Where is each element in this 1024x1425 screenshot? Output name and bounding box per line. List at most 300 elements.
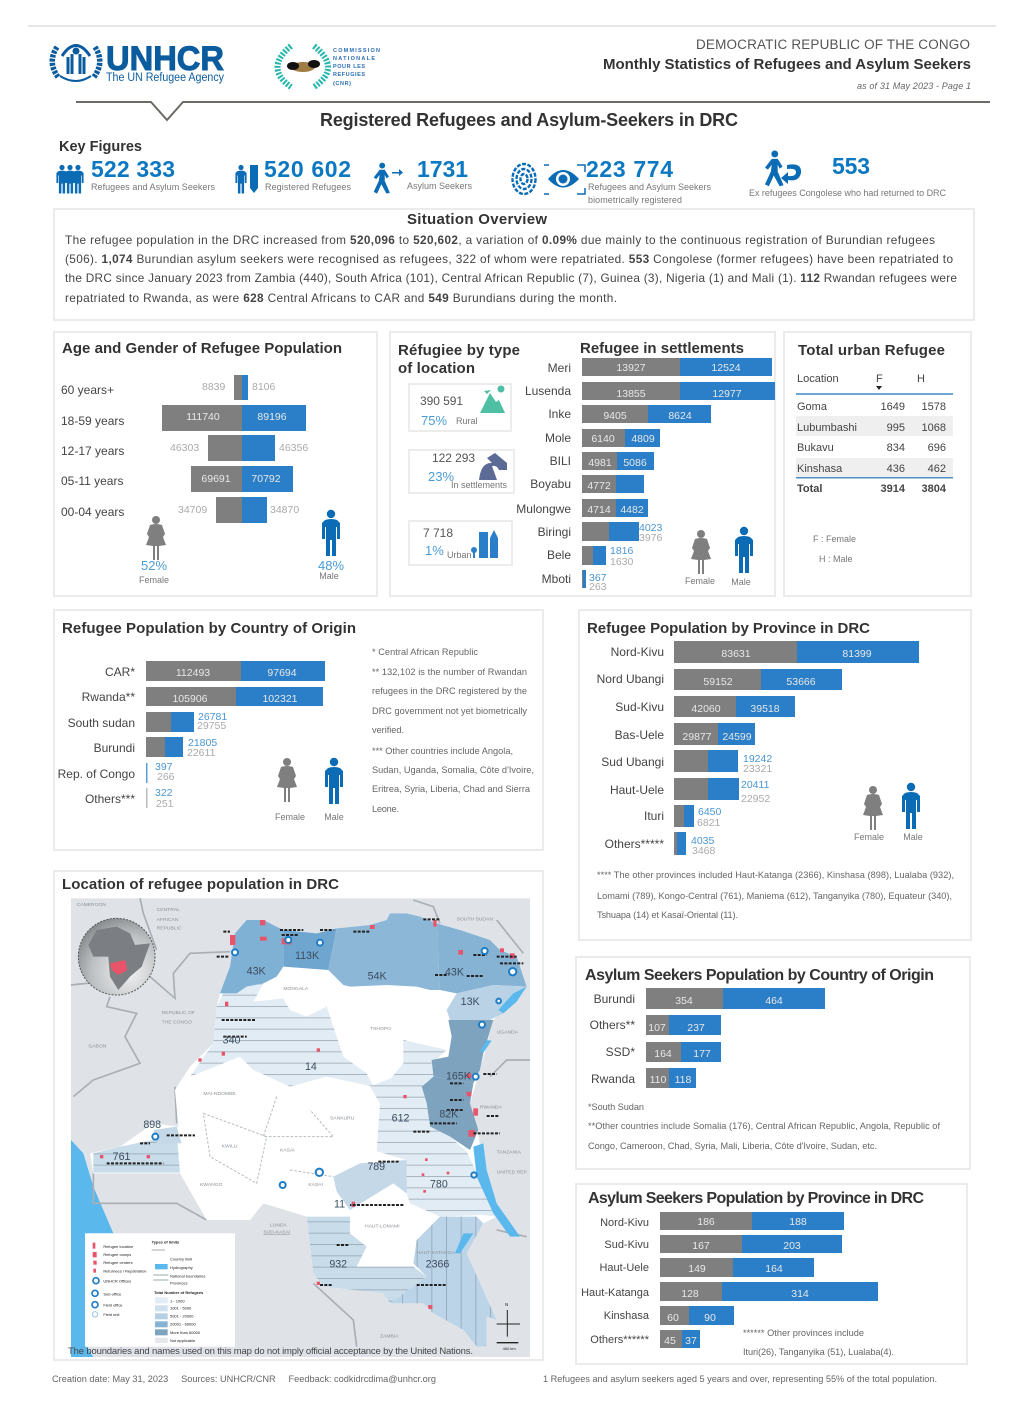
card: rural: Rural: [456, 416, 478, 426]
province: Nord-Kivu: [432, 1020, 493, 1083]
legend: total number of refugees: Total Number of Refugees: [154, 1290, 204, 1295]
bar: Mole: [545, 429, 660, 447]
bar: Meri: Meri: [548, 361, 571, 375]
bar: Meri: 13927: [616, 362, 646, 374]
female share: 52%: [141, 558, 167, 573]
row: 12-17 years: 46303: [170, 442, 199, 454]
female share: Female: [139, 575, 169, 585]
figure: asylum seekers: 1731: [417, 156, 468, 182]
legend: total number of refugees: Not applicable: [170, 1338, 196, 1343]
bar: Others: 322: [155, 787, 173, 799]
legend: total number of refugees: 1 - 1000: [170, 1298, 185, 1303]
card: urban: 7 718: [423, 526, 453, 540]
province value labels: 13K: [461, 996, 480, 1008]
panel: refugee population by province: [579, 610, 971, 940]
bar: CAR: 97694: [267, 667, 297, 679]
row: 05-11 years: 70792: [251, 473, 281, 485]
heading: Key Figures: [59, 139, 142, 155]
table: 834: [887, 442, 905, 454]
bar: Nord-Kivu: [600, 1212, 844, 1230]
bar: Meri: 12524: [711, 362, 741, 374]
card: rural: 75%: [421, 413, 447, 428]
map place names: MAI-NDOMBE: [203, 1091, 236, 1097]
bar: Biringi: 4023: [639, 522, 663, 534]
bar: Others: 4035: [691, 835, 715, 847]
bar: Nord-Kivu: 186: [697, 1216, 715, 1228]
bar: Nord-Kivu: 188: [789, 1216, 807, 1228]
bar: Bas-Uele: 24599: [722, 731, 752, 743]
bar: Ituri: 6821: [697, 817, 721, 829]
row: 18-59 years: 89196: [257, 411, 287, 423]
figure: biometric: 223 774: [586, 156, 673, 182]
heading: Age and Gender of Refugee Population: [62, 340, 342, 357]
bar: Bele: 1816: [610, 545, 634, 557]
province: Tanganyika: [378, 1152, 497, 1217]
panel: refugee by location and settlements: [390, 332, 775, 596]
bar: Bas-Uele: Bas-Uele: [615, 728, 664, 742]
heading: type of location: of location: [398, 360, 475, 377]
bar: Inke: [548, 405, 711, 423]
map place names: KWANGO: [200, 1182, 223, 1188]
bar: Nord-Kivu: [611, 641, 919, 663]
bar: Sud Ubangi: Sud Ubangi: [601, 755, 664, 769]
table: Goma: [797, 401, 828, 413]
row: 60 years+: [61, 375, 276, 400]
row: 00-04 years: 34709: [178, 504, 207, 516]
map disclaimer: The boundaries and names used on this map do not imply official acceptance by the United Nations.: [68, 1346, 473, 1357]
province: Maniema: [370, 1063, 467, 1152]
legend symbols: Returnees / Repatriation: [103, 1268, 147, 1273]
bar: Burundi: Burundi: [94, 741, 135, 755]
bar: Others: Others***: [85, 792, 135, 806]
province: Kongo Central: [93, 1133, 180, 1173]
icon: mountains: [480, 386, 505, 413]
bar: Sud-Kivu: [604, 1235, 842, 1253]
map place names: AFRICAN: [157, 917, 179, 923]
bar: Haut-Katanga: 128: [681, 1288, 699, 1300]
map place names: SUD-KASAI: [263, 1229, 290, 1235]
province: Equateur and Tshopo: [190, 983, 373, 1087]
CNR name: REFUGIES: [333, 72, 365, 78]
bar: Haut-Uele: [610, 778, 770, 805]
legend symbols: Refugee centers: [103, 1260, 133, 1265]
bar: Ituri: Ituri: [644, 809, 664, 823]
row: 00-04 years: 34870: [270, 504, 299, 516]
figure: returnees: [749, 151, 946, 198]
bar: Sud-Kivu: 203: [783, 1240, 801, 1252]
footer right: 1 Refugees and asylum seekers aged 5 years and over, representing 55% of the total population.: [543, 1374, 937, 1384]
icon: laurel wreath and handshake: [278, 46, 328, 87]
bar: Meri: [548, 358, 772, 376]
icon: person and pencil: [235, 165, 258, 194]
bar: Biringi: Biringi: [538, 525, 571, 539]
legend: female: Female: [275, 812, 305, 822]
bar: Haut-Katanga: [581, 1282, 878, 1301]
province: Sud-Kivu: [422, 1077, 478, 1150]
country name: DEMOCRATIC REPUBLIC OF THE CONGO: [696, 37, 970, 52]
province value labels: 54K: [368, 970, 387, 982]
province value labels: 11: [334, 1198, 345, 1210]
footnote: Ituri(26), Tanganyika (51), Lualaba(4).: [743, 1347, 894, 1357]
bar: Biringi: [538, 522, 663, 544]
footnote: Tshuapa (14) et Kasaï-Oriental (11).: [597, 910, 738, 920]
figure: total: Refugees and Asylum Seekers: [91, 182, 216, 192]
province value labels: 14: [305, 1061, 317, 1073]
map place names: KASAI: [308, 1182, 323, 1188]
table: 1649: [881, 401, 905, 413]
row: 05-11 years: [61, 466, 293, 492]
table: Lubumbashi: [797, 422, 857, 434]
footnotes: Eritrea, Syria, Liberia, Chad and Sierra: [372, 784, 531, 794]
bar: Rwanda: 105906: [172, 693, 208, 705]
map place names: LUNDA: [270, 1223, 288, 1229]
footnote: [597, 870, 954, 920]
map place names: REPUBLIC: [157, 925, 182, 931]
province: Kinshasa: [153, 1127, 182, 1143]
legend: male: [731, 527, 753, 587]
province: Haut-Katanga: [390, 1217, 497, 1347]
bar: BILI: 5086: [623, 457, 647, 469]
bar: Ituri: 6450: [698, 806, 722, 818]
bar: Sud Ubangi: 19242: [743, 753, 772, 765]
row: 00-04 years: 00-04 years: [61, 505, 124, 519]
neighbouring borders: [71, 898, 530, 1347]
bar: Inke: Inke: [548, 407, 571, 421]
map place names: SANKURU: [330, 1115, 355, 1121]
table: F: [876, 373, 883, 385]
bar: Others: 45: [664, 1335, 676, 1347]
panel: asylum seekers by province: [576, 1184, 967, 1364]
map markers: [100, 920, 515, 1309]
paragraph: The refugee population in the DRC increased from 520,096 to 520,602, a variation of 0.09% due mainly to the continuous registration of Burundian refugees: [65, 233, 935, 247]
footnotes: *** Other countries include Angola,: [372, 746, 513, 756]
bar: CAR: CAR*: [105, 665, 135, 679]
province: Lualaba: [307, 1217, 427, 1303]
bar: Rep. of Congo: Rep. of Congo: [58, 767, 135, 781]
footer left: Creation date: May 31, 2023 Sources: UNHCR/CNR Feedback: codkidrcdima@unhcr.org: [52, 1374, 436, 1384]
card: settlements: In settlements: [451, 480, 508, 490]
row: 05-11 years: 69691: [201, 473, 231, 485]
bar: Rep. of Congo: 397: [155, 761, 173, 773]
map place names: TANZANIA: [497, 1149, 522, 1155]
figure: biometric: biometrically registered: [588, 195, 682, 205]
legend: types of limits: Hydrography: [170, 1265, 193, 1270]
legend: female: Female: [854, 832, 884, 842]
bar: Mole: 4809: [631, 433, 655, 445]
map of DRC: [71, 898, 530, 1357]
legend: female: Female: [685, 576, 715, 586]
map place names: HAUT-KATANGA: [417, 1250, 455, 1256]
card: urban: Urban: [447, 550, 472, 560]
icon: UNHCR emblem: [52, 46, 100, 81]
bar: Bele: 1630: [610, 556, 634, 568]
bar: Haut-Uele: 22952: [741, 793, 770, 805]
legend symbols: [92, 1243, 147, 1317]
globe inset: [78, 918, 155, 995]
heading: Total urban Refugee: [798, 342, 945, 359]
map place names: KWILU: [222, 1144, 238, 1150]
CNR name: (CNR): [333, 81, 351, 87]
bar: Lusenda: 13855: [616, 388, 646, 400]
central province outlines: [203, 1097, 333, 1183]
compass and scale: N: [505, 1302, 508, 1307]
header divider with chevron: [76, 102, 990, 120]
card: urban: 1%: [425, 543, 444, 558]
icon: eye scan: [544, 165, 585, 194]
legend: total number of refugees: 20001 - 60000: [170, 1321, 196, 1326]
icon: city buildings: [471, 530, 498, 558]
bar: BILI: 4981: [588, 457, 612, 469]
footnote: **** The other provinces included Haut-Katanga (2366), Kinshasa (898), Lualaba (932),: [597, 870, 954, 880]
province value labels: 82K: [439, 1108, 458, 1120]
bar: Boyabu: Boyabu: [530, 477, 571, 491]
bar: Others: 237: [687, 1022, 705, 1034]
bar: Nord-Kivu: 83631: [721, 648, 751, 660]
heading: type of location: [398, 342, 520, 377]
province value labels: 43K: [247, 966, 266, 978]
footnotes: [588, 1102, 940, 1151]
province value labels: 612: [392, 1112, 410, 1124]
map place names: HAUT-LOMAMI: [365, 1223, 400, 1229]
row: 60 years+: 8106: [252, 381, 276, 393]
heading: Refugee Population by Province in DRC: [587, 620, 870, 637]
bar: Bele: Bele: [547, 548, 571, 562]
card: settlements: 122 293: [432, 451, 475, 465]
map place names: TSHOPO: [370, 1026, 391, 1032]
figure: total: [56, 156, 216, 194]
footnotes: refugees in the DRC registered by the: [372, 686, 527, 696]
icon: fingerprint: [512, 164, 536, 194]
row: 12-17 years: [61, 435, 308, 461]
province value labels: 340: [223, 1034, 241, 1046]
bar: CAR: 112493: [176, 667, 210, 679]
card: urban: [409, 521, 512, 565]
footnotes: [372, 647, 534, 814]
report title: Monthly Statistics of Refugees and Asylum Seekers: [603, 56, 971, 73]
bar: Kinshasa: Kinshasa: [604, 1310, 650, 1322]
bar: Sud-Kivu: Sud-Kivu: [615, 700, 664, 714]
map place names: KASAI: [280, 1148, 295, 1154]
bar: Rwanda: Rwanda: [591, 1072, 635, 1086]
table: 436: [887, 463, 905, 475]
bar: Others: 37: [685, 1335, 697, 1347]
bar: Rep. of Congo: [58, 761, 175, 783]
bar: Rwanda: Rwanda**: [82, 690, 135, 704]
table: 1578: [922, 401, 946, 413]
footnote: Lomami (789), Kongo-Central (761), Maniema (612), Tanganyika (780), Equateur (340),: [597, 891, 952, 901]
bar: Lusenda: 12977: [712, 388, 742, 400]
paragraph: the DRC since January 2023 from Zambia (440), South Africa (101), Central African Republic (7), Guinea (3), Nigeria (1) and Mali (1). 112 Rwandan refugees were: [65, 271, 957, 285]
row: 18-59 years: 111740: [186, 411, 220, 423]
bar: Bas-Uele: [615, 723, 755, 745]
figure: asylum seekers: [374, 156, 472, 194]
logo: CNR: [278, 46, 380, 87]
map place names: CAMEROON: [77, 902, 106, 908]
legend: male: [902, 783, 923, 842]
panel: refugee population by country of origin: [54, 610, 543, 850]
CNR name: POUR LES: [333, 64, 365, 70]
bar: Mboti: 263: [589, 581, 607, 593]
legend: male: Male: [324, 812, 344, 822]
row: 12-17 years: 46356: [279, 442, 308, 454]
table: 696: [928, 442, 946, 454]
blue office markers: [152, 937, 516, 1188]
bar: Nord Ubangi: 53666: [786, 676, 816, 688]
row: 60 years+: 60 years+: [61, 383, 114, 397]
bar: Others: [605, 832, 716, 857]
province value labels: 761: [113, 1151, 131, 1163]
card: rural: [409, 384, 511, 431]
male share: [318, 510, 344, 581]
legend: female: [685, 530, 715, 586]
bar: Mulongwe: 4482: [620, 504, 644, 516]
legend: male: Male: [903, 832, 923, 842]
province value labels: 2366: [426, 1259, 449, 1271]
bar: Rep. of Congo: 266: [157, 771, 175, 783]
bar: BILI: BILI: [550, 454, 571, 468]
bar: Nord Ubangi: [597, 669, 842, 690]
bar: Mulongwe: Mulongwe: [516, 502, 571, 516]
bar: South Sudan: 29755: [197, 720, 226, 732]
footnotes: ** 132,102 is the number of Rwandan: [372, 667, 527, 677]
province: north band: [220, 920, 283, 993]
bar: Others: [590, 1330, 700, 1348]
bar: Haut-Uele: Haut-Uele: [610, 783, 664, 797]
table: Bukavu: [797, 442, 834, 454]
male share: Male: [319, 571, 339, 581]
icon: walking person with arrow: [374, 163, 403, 194]
bar: Haut-Uele: [599, 1258, 814, 1277]
panel: total urban refugee: [784, 332, 971, 596]
icon: returning person: [765, 151, 801, 186]
bar: Mboti: Mboti: [542, 572, 571, 586]
CNR name: NATIONALE: [333, 56, 375, 62]
figure: returnees: Ex refugees Congolese who had returned to DRC: [749, 188, 946, 198]
paragraph: [65, 233, 957, 305]
heading: settlements: Refugee in settlements: [580, 340, 744, 357]
legend: types of limits: Types of limits: [152, 1239, 180, 1244]
footnotes: **Other countries include Somalia (176), Central African Republic, Angola, Republic of: [588, 1121, 940, 1131]
bar: Mboti: [542, 570, 607, 593]
legend: total number of refugees: 1001 - 5000: [170, 1305, 192, 1310]
footnotes: verified.: [372, 725, 404, 735]
CNR name: [333, 48, 380, 87]
male share: 48%: [318, 558, 344, 573]
heading: Asylum Seekers Population by Province in DRC: [588, 1190, 924, 1207]
panel: age and gender: [54, 332, 377, 596]
table: 3914: [881, 483, 906, 495]
paragraph: (506). 1,074 Burundian asylum seekers were recognised as refugees, 322 of whom were repatriated. 553 Congolese (former refugees) have been repatriated to: [65, 252, 953, 266]
figure: biometric: [512, 156, 712, 205]
legend symbols: UNHCR Offices: [103, 1278, 131, 1283]
card: settlements: [409, 450, 514, 493]
bar: Sud-Kivu: 42060: [691, 703, 721, 715]
footnote: [743, 1328, 894, 1357]
footnotes: DRC government not yet biometrically: [372, 706, 527, 716]
bar: Bas-Uele: 29877: [682, 731, 712, 743]
province: Kasai-Oriental: [333, 1160, 407, 1210]
map place names: REPUBLIC OF: [162, 1010, 195, 1016]
bar: Sud-Kivu: 39518: [750, 703, 780, 715]
bar: Others: Others*****: [605, 837, 664, 851]
header right: [603, 37, 971, 91]
legend: total number of refugees: 5001 - 20000: [170, 1313, 194, 1318]
bar: Boyabu: 4772: [587, 480, 611, 492]
bar: South Sudan: South sudan: [68, 716, 135, 730]
heading: Refugee Population by Country of Origin: [62, 620, 356, 637]
legend: male: [324, 758, 344, 822]
province value labels: 43K: [445, 966, 464, 978]
main title: Registered Refugees and Asylum-Seekers in DRC: [320, 110, 738, 130]
bar: Sud-Kivu: Sud-Kivu: [604, 1239, 649, 1251]
legend: types of limits: Country limit: [170, 1257, 193, 1262]
icon: shelter: [479, 453, 507, 480]
figure: registered refugees: 520 602: [264, 156, 351, 182]
legend: total number of refugees: [154, 1290, 204, 1343]
bar: Ituri: [644, 805, 722, 829]
bar: Nord-Kivu: Nord-Kivu: [611, 645, 664, 659]
bar: Haut-Uele: 149: [688, 1263, 706, 1275]
bar: Kinshasa: 60: [667, 1312, 679, 1324]
DRC base: [90, 913, 527, 1347]
panel: asylum seekers by country of origin: [576, 957, 970, 1169]
bar: Nord Ubangi: Nord Ubangi: [597, 672, 664, 686]
bar: SSD: 177: [693, 1048, 711, 1060]
legend symbols: Refugee camps: [103, 1252, 131, 1257]
table: H: [917, 373, 925, 385]
footnotes: Congo, Cameroon, Chad, Syria, Mali, Liberia, Côte d'Ivoire, Sudan, etc.: [588, 1141, 877, 1151]
bar: Mole: 6140: [591, 433, 615, 445]
bar: Lusenda: [525, 382, 775, 400]
bar: Haut-Katanga: 314: [791, 1288, 809, 1300]
key: [813, 534, 856, 564]
tagline: The UN Refugee Agency: [106, 72, 224, 84]
bar: Rwanda: 110: [650, 1074, 667, 1086]
bar: Nord-Kivu: Nord-Kivu: [600, 1217, 649, 1229]
bar: Others: 251: [156, 798, 174, 810]
legend box: [85, 1233, 235, 1347]
figure: registered refugees: Registered Refugees: [265, 182, 352, 192]
date: as of 31 May 2023 - Page 1: [857, 81, 971, 91]
bar: SSD: [606, 1042, 721, 1062]
heading: Asylum Seekers Population by Country of Origin: [585, 967, 934, 984]
bar: Mole: Mole: [545, 431, 571, 445]
bar: BILI: [550, 452, 654, 470]
legend symbols: Field unit: [103, 1312, 120, 1317]
legend: types of limits: Provinces: [170, 1281, 188, 1286]
bar: Kinshasa: 90: [704, 1312, 716, 1324]
row: 12-17 years: 12-17 years: [61, 444, 124, 458]
heading: Situation Overview: [407, 211, 547, 228]
UNHCR wordmark: UNHCR: [106, 40, 224, 78]
figure: total: 522 333: [91, 156, 175, 182]
row: 18-59 years: 18-59 years: [61, 414, 124, 428]
map place names: MONGALA: [283, 986, 309, 992]
bar: SSD: SSD*: [606, 1045, 635, 1059]
footnotes: Leone.: [372, 804, 399, 814]
bar: Others: 3468: [692, 845, 716, 857]
bar: Others: Others**: [590, 1018, 635, 1032]
bar: Sud Ubangi: 23321: [743, 763, 772, 775]
province value labels: [113, 950, 480, 1271]
key: H : Male: [819, 554, 853, 564]
bar: Sud-Kivu: [615, 696, 795, 717]
bar: Burundi: Burundi: [594, 992, 635, 1006]
legend: female: [275, 758, 305, 822]
legend: female: [854, 786, 884, 842]
bar: Mulongwe: [516, 499, 648, 517]
footnote: ****** Other provinces include: [743, 1328, 864, 1338]
